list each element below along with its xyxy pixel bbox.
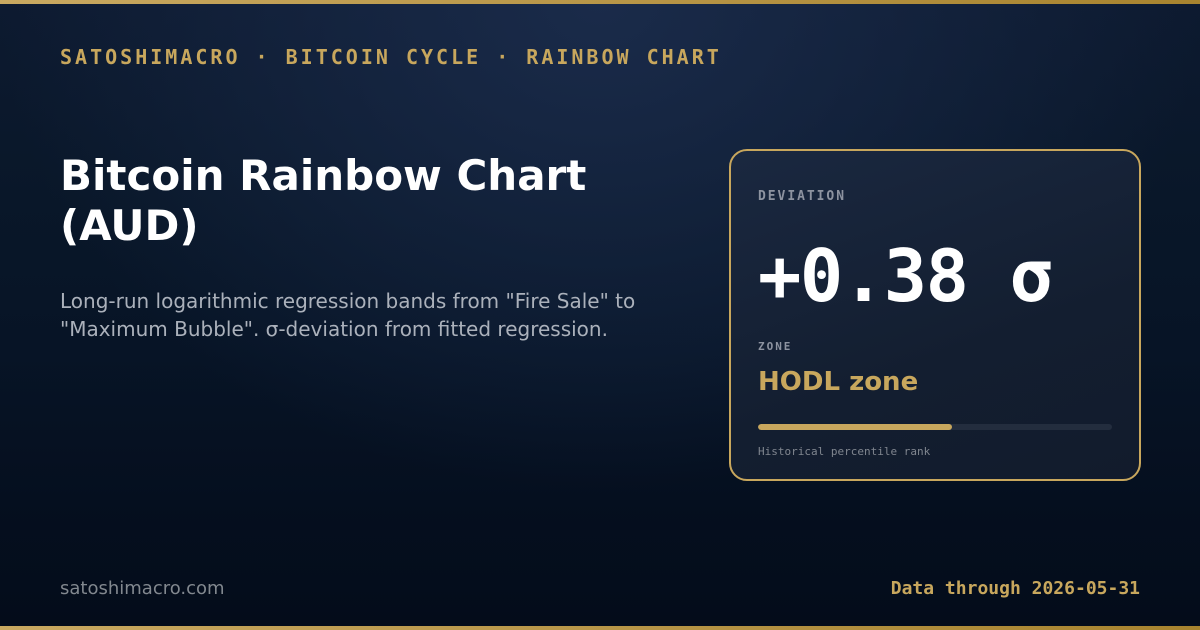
percentile bar fill (758, 424, 952, 430)
description (60, 289, 635, 341)
footer data date: Data through 2026-05-31 (891, 578, 1140, 599)
footer site name: satoshimacro.com (60, 578, 225, 599)
bottom accent bar (0, 626, 1200, 630)
panel: deviation card (729, 149, 1141, 481)
zone value: HODL zone (758, 367, 918, 397)
top accent bar (0, 0, 1200, 4)
percentile bar (758, 424, 1112, 430)
eyebrow heading: SATOSHIMACRO · BITCOIN CYCLE · RAINBOW CHART (60, 45, 722, 69)
description: "Maximum Bubble". σ-deviation from fitted regression. (60, 317, 608, 341)
percentile caption: Historical percentile rank (758, 445, 930, 458)
description: Long-run logarithmic regression bands from "Fire Sale" to (60, 289, 635, 313)
title (60, 151, 586, 250)
zone label: ZONE (758, 340, 792, 353)
deviation label: DEVIATION (758, 189, 846, 204)
title: Bitcoin Rainbow Chart (60, 151, 586, 200)
deviation value: +0.38 σ (758, 234, 1051, 318)
title: (AUD) (60, 201, 199, 250)
